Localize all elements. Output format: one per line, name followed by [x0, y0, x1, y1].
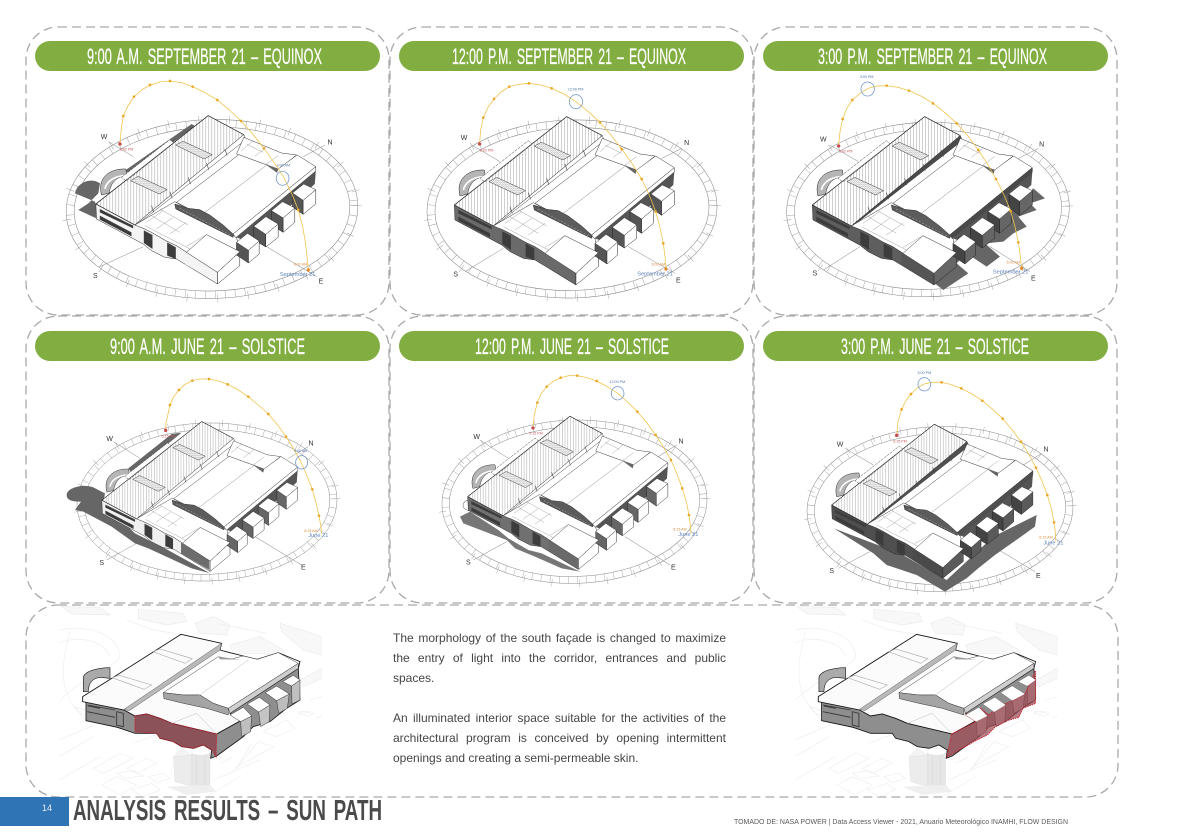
heading: 9:00 AM September equinox: 9:00 A.M. SEPTEMBER 21 – EQUINOX — [87, 44, 322, 69]
text block: façade description 1 — [393, 631, 726, 685]
shadow and compass axes — [67, 433, 308, 573]
sun path: E — [676, 277, 681, 284]
panel: 12:00 PM June — [390, 316, 753, 603]
building model — [102, 422, 298, 571]
compass ring — [64, 116, 360, 302]
sun path — [93, 80, 332, 285]
text block: façade description 2: architectural program is conceived by opening intermittent — [393, 731, 726, 745]
sun path: 3:00 PM — [918, 371, 931, 375]
white box tops — [966, 675, 1036, 722]
heading: 12:00 PM September equinox: 12:00 P.M. SEPTEMBER 21 – EQUINOX — [452, 44, 686, 69]
sun path: W — [106, 436, 113, 443]
sun path: E — [671, 565, 676, 572]
compass axes — [465, 145, 682, 273]
shadow and compass axes — [460, 440, 677, 572]
sun path: E — [319, 278, 324, 285]
sun path: S — [453, 272, 458, 279]
sun path: 12:00 PM — [568, 88, 583, 92]
sun path: 5:15 PM — [162, 434, 175, 438]
sun path: N — [684, 140, 689, 147]
compass ring — [75, 420, 339, 584]
heading: 9:00 AM June solstice — [35, 331, 380, 361]
sun path: W — [820, 136, 827, 143]
sun path: S — [99, 560, 104, 567]
sun path — [453, 82, 689, 284]
heading: 12:00 PM September equinox — [399, 41, 744, 71]
footer: page number tab — [0, 797, 69, 826]
panel: 12:00 PM September — [390, 27, 753, 315]
sun path: 6:02 AM — [1007, 261, 1020, 265]
sun path: 3:00 PM — [860, 75, 873, 79]
sun path: W — [461, 135, 468, 142]
sun path: 9:00 AM — [294, 449, 307, 453]
sun path: 6:02 AM — [294, 263, 307, 267]
shadows and compass axes — [823, 145, 1045, 290]
sun path: 5:15 PM — [893, 439, 907, 443]
compass ring — [805, 423, 1075, 595]
footer: source credit: TOMADO DE: NASA POWER | Data Access Viewer - 2021, Anuario Meteorológico INAMHI, FLOW DESIGN — [734, 817, 1068, 826]
heading: 12:00 PM June solstice: 12:00 P.M. JUNE 21 – SOLSTICE — [475, 334, 669, 359]
sun path: 6:02 PM — [480, 148, 493, 152]
sun path: E — [1031, 276, 1036, 283]
sun path: S — [93, 273, 98, 280]
sun path: S — [466, 560, 471, 567]
sun path: 5:15 PM — [529, 432, 543, 436]
building model — [468, 416, 668, 569]
illustration: east façade highlighted — [795, 607, 1058, 797]
sun path: 6:02 PM — [120, 148, 133, 152]
sun path: N — [1039, 141, 1044, 148]
sun path: W — [101, 134, 108, 141]
heading: 3:00 PM June solstice: 3:00 P.M. JUNE 21 – SOLSTICE — [841, 334, 1029, 359]
text block: façade description 1: The morphology of the south façade is changed to maximize — [393, 631, 726, 645]
sun path — [466, 374, 698, 572]
sun path: June 21 — [678, 532, 698, 538]
highlighted façade — [135, 714, 217, 757]
heading: 9:00 AM June solstice: 9:00 A.M. JUNE 21 – SOLSTICE — [110, 334, 305, 359]
sun path: September 21 — [637, 271, 673, 277]
panel: 9:00 AM June — [26, 316, 389, 603]
sun path: W — [473, 434, 480, 441]
sun path: 6:15 AM — [304, 529, 318, 533]
sun path: 6:02 PM — [839, 149, 852, 153]
sun path: E — [1036, 573, 1041, 580]
sun path: N — [327, 140, 332, 147]
sun path: N — [1043, 446, 1048, 453]
panel: 3:00 PM June — [754, 316, 1117, 603]
text block: façade description 2: openings and creating a semi-permeable skin. — [393, 751, 638, 765]
illustration: south façade highlighted — [59, 607, 322, 797]
sun path: E — [301, 565, 306, 572]
sun path: 12:00 PM — [609, 380, 625, 384]
sun path: 6:02 AM — [652, 262, 665, 266]
text block: façade description 1: the entry of light into the corridor, entrances and public — [393, 651, 726, 665]
sun path: June 21 — [1043, 541, 1063, 547]
text block: façade description 1: spaces. — [393, 671, 434, 685]
panel: 3:00 PM September — [754, 27, 1117, 315]
panel: south façade morphology — [26, 605, 1118, 797]
sun path: 6:15 AM — [673, 528, 687, 532]
building model — [832, 424, 1033, 578]
sun path: W — [837, 441, 844, 448]
sun path: September 21 — [280, 272, 315, 278]
shadow and compass axes — [75, 124, 325, 277]
sun path — [99, 378, 328, 572]
building model — [812, 117, 1032, 285]
sun path: N — [678, 439, 683, 446]
building model — [454, 117, 674, 285]
sun path — [829, 371, 1063, 580]
sun path: S — [813, 271, 818, 278]
heading: 12:00 PM June solstice — [399, 331, 744, 361]
sun path: N — [308, 441, 313, 448]
panel: 9:00 AM September — [26, 27, 389, 315]
highlighted façade — [947, 671, 1036, 757]
compass ring — [784, 119, 1072, 300]
sun path: 6:15 AM — [1039, 536, 1053, 540]
sun path: 9:00 AM — [277, 164, 290, 168]
compass ring — [440, 417, 709, 587]
heading: 3:00 PM September equinox — [763, 41, 1108, 71]
compass ring — [425, 116, 719, 302]
building model — [96, 116, 316, 284]
sun path: September 21 — [993, 270, 1028, 276]
text block: façade description 2: An illuminated interior space suitable for the activities of the — [393, 711, 726, 725]
heading: 3:00 PM June solstice — [763, 331, 1108, 361]
sun path: S — [829, 568, 834, 575]
sun path — [813, 75, 1044, 283]
footer: section title: ANALYSIS RESULTS – SUN PATH — [73, 795, 382, 827]
shadows and compass axes — [834, 448, 1042, 592]
sun path: June 21 — [308, 533, 328, 539]
text block: façade description 2 — [393, 711, 726, 765]
heading: 9:00 AM September equinox — [35, 41, 380, 71]
footer: page number tab: 14 — [42, 803, 52, 813]
